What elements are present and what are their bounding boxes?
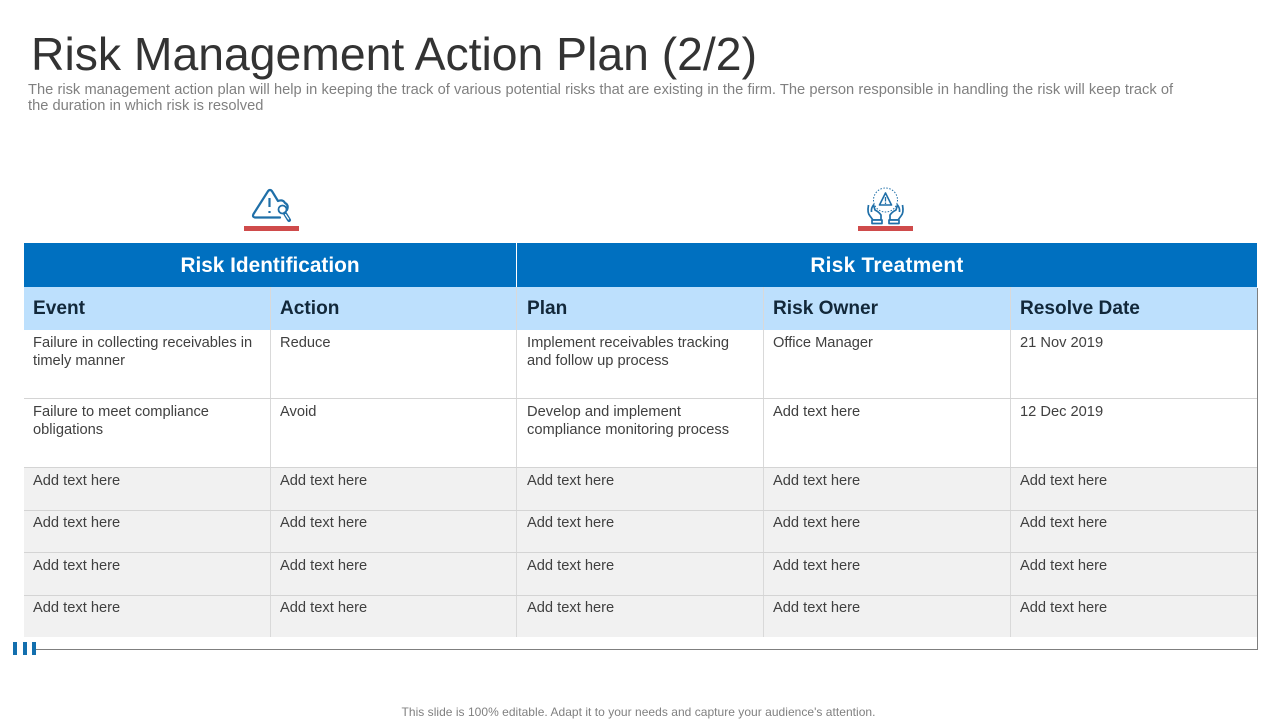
row 1: timely manner [33, 353, 125, 369]
row 4: Add text here [280, 515, 367, 531]
row 6: Add text here [773, 600, 860, 616]
icon: hands holding warning [858, 188, 913, 231]
row 5: Add text here [33, 558, 120, 574]
row 2: obligations [33, 422, 103, 438]
row 3: Add text here [1020, 473, 1107, 489]
row 6: Add text here [527, 600, 614, 616]
row 2 [33, 404, 1103, 438]
row 3: Add text here [33, 473, 120, 489]
row 1: Failure in collecting receivables in [33, 335, 252, 351]
row 4 [33, 515, 1107, 531]
column header row [24, 287, 1257, 330]
row 4: Add text here [773, 515, 860, 531]
header band: risk identification: Risk Identification [180, 254, 360, 277]
row 6 [33, 600, 1107, 616]
row 1: Reduce [280, 335, 331, 351]
row 3: Add text here [527, 473, 614, 489]
icon: risk search warning triangle [244, 188, 299, 231]
row 6: Add text here [1020, 600, 1107, 616]
subtitle text: The risk management action plan will help in keeping the track of various potential risks that are existing in the firm. The person responsible in handling the risk will keep track of [28, 82, 1173, 98]
row 2: Develop and implement [527, 404, 681, 420]
table frame line [36, 288, 1258, 650]
row 5 [33, 558, 1107, 574]
header band: risk treatment [517, 243, 1257, 287]
row 5: Add text here [280, 558, 367, 574]
row 2: compliance monitoring process [527, 422, 729, 438]
row 5: Add text here [527, 558, 614, 574]
row 2: Add text here [773, 404, 860, 420]
row 4: Add text here [1020, 515, 1107, 531]
row 2: Avoid [280, 404, 316, 420]
row 1: Implement receivables tracking [527, 335, 729, 351]
row 6: Add text here [33, 600, 120, 616]
column headings: Action [280, 298, 339, 319]
row 3 [33, 473, 1107, 489]
subtitle text: the duration in which risk is resolved [28, 98, 263, 114]
column headings: Resolve Date [1020, 298, 1140, 319]
row 1: 21 Nov 2019 [1020, 335, 1103, 351]
column headings: Risk Owner [773, 298, 878, 319]
column headings: Plan [527, 298, 567, 319]
row 5: Add text here [773, 558, 860, 574]
row 1: and follow up process [527, 353, 669, 369]
footer note: This slide is 100% editable. Adapt it to your needs and capture your audience's attention. [402, 705, 875, 719]
row 6: Add text here [280, 600, 367, 616]
title: Risk Management Action Plan (2/2) [31, 28, 757, 80]
three blue bars marker [13, 642, 36, 655]
column headings [33, 298, 1140, 319]
row 2: Failure to meet compliance [33, 404, 209, 420]
row 2: 12 Dec 2019 [1020, 404, 1103, 420]
row 3: Add text here [773, 473, 860, 489]
row 1: Office Manager [773, 335, 873, 351]
row 1 [33, 335, 1103, 369]
column headings: Event [33, 298, 85, 319]
header band: risk treatment: Risk Treatment [810, 254, 964, 277]
header band: risk identification [24, 243, 516, 287]
row 5: Add text here [1020, 558, 1107, 574]
row 3: Add text here [280, 473, 367, 489]
row 4: Add text here [33, 515, 120, 531]
row 4: Add text here [527, 515, 614, 531]
subtitle text [28, 82, 1174, 114]
grey rows background [24, 467, 1257, 637]
